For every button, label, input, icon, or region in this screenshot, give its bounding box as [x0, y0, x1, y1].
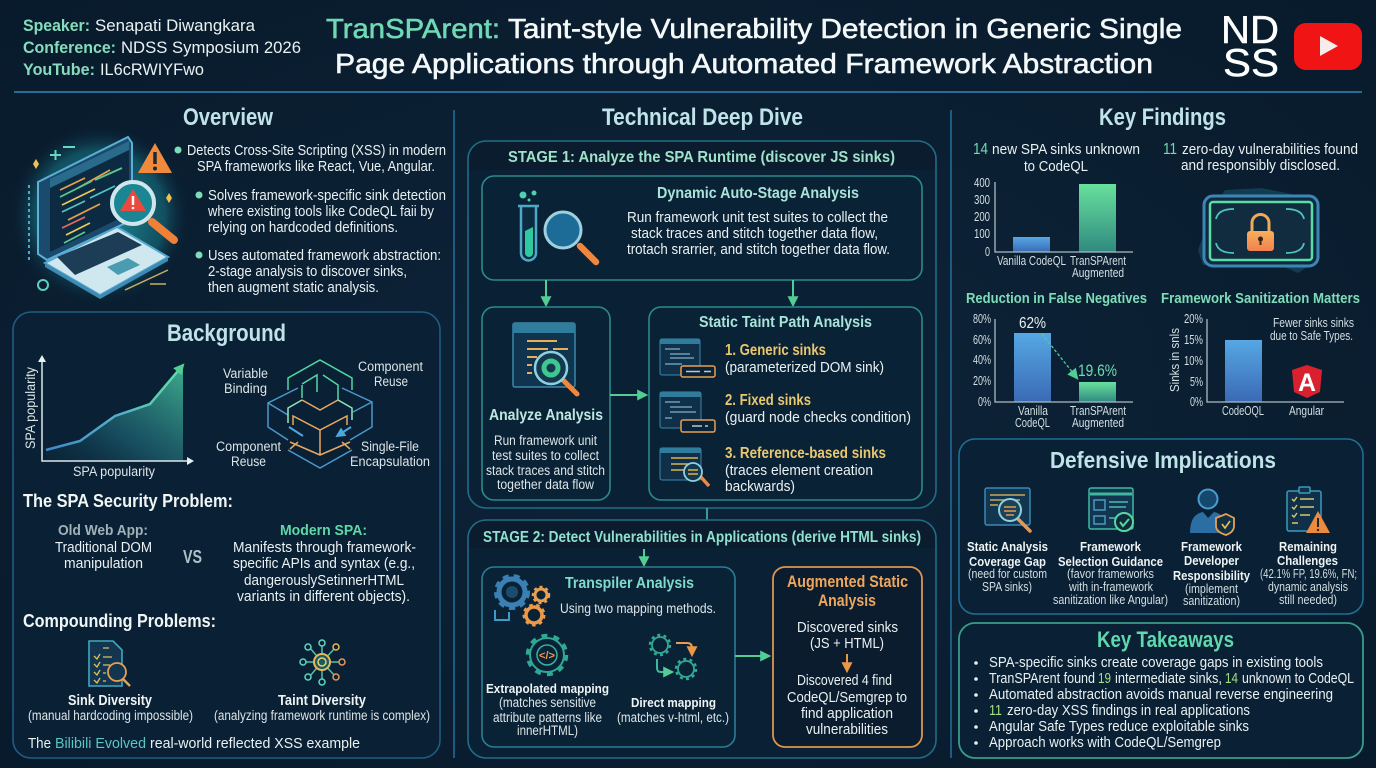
list: takeaways: intermediate sinks, [1115, 671, 1222, 687]
icon: lock card [1198, 188, 1318, 273]
diagram: SPA framework features: Single-File [361, 439, 419, 454]
chart: framework sanitization: Fewer sinks sinks [1273, 316, 1354, 330]
list: takeaways: zero-day XSS findings in real applications [1007, 703, 1250, 719]
box: static taint path analysis: (traces element creation [725, 463, 873, 479]
heading: overview: Overview [183, 104, 273, 131]
icon: framework selection [1089, 488, 1133, 531]
header: speaker info: Senapati Diwangkara [95, 17, 256, 35]
chart: framework sanitization: 10% [1184, 354, 1203, 368]
text block: overview bullets [174, 143, 446, 296]
text block: framework selection: Framework [1080, 539, 1142, 554]
text block: modern SPA: dangerouslySetinnerHTML [244, 573, 404, 589]
heading: SPA security problem: The SPA Security Problem: [23, 490, 233, 511]
box: analyze analysis: Run framework unit [494, 433, 597, 448]
icon: code gear: </> [539, 650, 555, 662]
box: analyze analysis: Analyze Analysis [489, 407, 603, 424]
title: Taint-style Vulnerability Detection in Generic Single [508, 13, 1182, 44]
diagram: SPA framework features: Variable [223, 366, 268, 381]
icon: gears [495, 576, 549, 625]
box: analyze analysis [482, 307, 610, 500]
text block: sink diversity: (manual hardcoding impossible) [28, 708, 193, 723]
box: static taint path analysis: Static Taint Path Analysis [699, 314, 872, 331]
header: speaker info: Conference: [23, 39, 116, 57]
panel: overview [10, 104, 446, 305]
text block: sink diversity: Sink Diversity [68, 693, 152, 709]
diagram: SPA framework features: Reuse [231, 454, 266, 469]
header: speaker info: Speaker: [23, 17, 90, 35]
chart: sinks found: 0 [985, 245, 990, 259]
icon: reference sink window [660, 448, 709, 486]
chart: false negatives: 20% [973, 374, 991, 388]
box: augmented static analysis: Augmented Static [787, 573, 908, 591]
chart: sinks found [974, 176, 1133, 280]
text block: modern SPA: Modern SPA: [280, 522, 367, 539]
box: transpiler analysis: Transpiler Analysis [565, 575, 694, 592]
box: static taint path analysis: (guard node checks condition) [725, 410, 911, 426]
list: takeaways: 19 [1098, 671, 1111, 687]
text block: developer responsibility: (implement [1185, 582, 1238, 596]
chart: framework sanitization: 0% [1190, 395, 1203, 409]
list: takeaways: TranSPArent found [989, 671, 1095, 687]
text block: overview bullets: Uses automated framework abstraction: [208, 248, 441, 264]
box: transpiler analysis: Extrapolated mapping [486, 681, 609, 696]
box: augmented static analysis: (JS + HTML) [810, 636, 884, 652]
NDSS logo: ND [1221, 9, 1279, 52]
heading: stage 2: STAGE 2: Detect Vulnerabilities in Applications (derive HTML sinks) [483, 529, 921, 546]
heading: key takeaways: Key Takeaways [1097, 627, 1234, 652]
chart: SPA popularity: SPA popularity [23, 367, 38, 449]
text block: remaining challenges: Challenges [1277, 553, 1338, 568]
icon: sink diversity document [89, 641, 130, 686]
text block: coverage gap: (need for custom [968, 567, 1047, 581]
text block: overview bullets: where existing tools like CodeQL faii by [207, 204, 435, 220]
text block: overview bullets: 2-stage analysis to discover sinks, [208, 264, 407, 280]
icon: generic sink code window [660, 339, 715, 377]
chart: framework sanitization: 5% [1190, 375, 1203, 389]
heading: defensive implications: Defensive Implications [1050, 447, 1276, 473]
diagram: SPA framework features: Encapsulation [350, 454, 430, 469]
heading: framework sanitization: Framework Sanitization Matters [1161, 291, 1360, 307]
panel: defensive implications [959, 439, 1363, 614]
text block: overview bullets: relying on hardcoded definitions. [208, 220, 398, 236]
chart: framework sanitization: 15% [1184, 333, 1203, 347]
text block: remaining challenges: still needed) [1279, 593, 1337, 607]
panel: stage 2 [468, 520, 936, 758]
heading: stage 1: STAGE 1: Analyze the SPA Runtime (discover JS sinks) [508, 149, 895, 166]
list: takeaways: 14 [1225, 671, 1238, 687]
text block: framework selection: with in-framework [1068, 580, 1154, 594]
box: dynamic auto-stage analysis: Dynamic Auto-Stage Analysis [657, 185, 859, 202]
chart: framework sanitization: due to Safe Types. [1270, 329, 1353, 343]
heading: reduction in false negatives: Reduction in False Negatives [966, 291, 1147, 307]
box: dynamic auto-stage analysis [482, 176, 922, 280]
box: augmented static analysis [773, 567, 922, 747]
title: TranSPArent: [326, 13, 500, 44]
box: transpiler analysis: attribute patterns like [493, 710, 602, 725]
icon: YouTube [1294, 23, 1362, 70]
chart: framework sanitization: A [1298, 369, 1316, 397]
box: augmented static analysis: vulnerabilities [806, 722, 888, 738]
icon: laptop with magnifier and warning [10, 125, 190, 305]
title: Page Applications through Automated Framework Abstraction [335, 48, 1153, 79]
text block: developer responsibility: Developer [1184, 553, 1239, 568]
icon: taint diversity network [300, 640, 345, 685]
diagram: SPA framework features: Component [358, 359, 423, 374]
chart: framework sanitization: Sinks in snls [1168, 328, 1182, 392]
arrow: dynamic to analyze [545, 280, 547, 305]
label: versus: VS [183, 547, 202, 567]
text block: Bilibili Evolved example: real-world reflected XSS example [150, 736, 360, 752]
chart: SPA popularity: SPA popularity [73, 464, 155, 479]
text block: Bilibili Evolved example [28, 736, 360, 752]
box: static taint path analysis: backwards) [725, 479, 795, 495]
box: analyze analysis: stack traces and stitch [486, 463, 605, 478]
text block: old web app [55, 522, 152, 572]
icon: developer with shield [1190, 490, 1234, 535]
text block: modern SPA [233, 522, 416, 605]
box: static taint path analysis: 3. Reference-based sinks [725, 445, 886, 462]
heading: technical deep dive: Technical Deep Dive [602, 104, 803, 131]
chart: sinks found: TranSPArent [1070, 254, 1126, 268]
box: analyze analysis: test suites to collect [492, 448, 599, 463]
icon: fixed sink code window [660, 392, 715, 432]
diagram: SPA framework features: Binding [224, 381, 267, 396]
panel: stage 1 [468, 141, 936, 508]
box: transpiler analysis: innerHTML) [517, 723, 578, 738]
list: takeaways: unknown to CodeQL [1242, 671, 1354, 687]
diagram: SPA framework features: Reuse [374, 374, 408, 389]
text block: overview bullets: Detects Cross-Site Scripting (XSS) in modern [187, 143, 446, 159]
arrow: dynamic to static [792, 280, 794, 305]
text block: remaining challenges: dynamic analysis [1268, 580, 1348, 594]
box: augmented static analysis: find application [801, 706, 893, 722]
list: takeaways: Automated abstraction avoids manual reverse engineering [989, 687, 1333, 703]
chart: framework sanitization: Angular [1289, 404, 1324, 418]
arrow: analyze to static [610, 394, 646, 396]
text block: sink diversity [28, 693, 193, 723]
stat: 14 new sinks: new SPA sinks unknown [992, 142, 1140, 158]
list: takeaways: SPA-specific sinks create coverage gaps in existing tools [989, 655, 1323, 671]
box: static taint path analysis: (parameterized DOM sink) [725, 360, 884, 376]
arrow: transpiler to augmented [735, 655, 769, 657]
icon: code gear [528, 636, 566, 674]
box: augmented static analysis: Discovered 4 find [797, 673, 892, 689]
text block: remaining challenges [1260, 539, 1357, 607]
heading: compounding problems: Compounding Problems: [23, 610, 216, 631]
box: transpiler analysis [482, 567, 735, 747]
list: takeaways [974, 655, 1354, 751]
text block: overview bullets: then augment static analysis. [208, 280, 379, 296]
text block: old web app: Old Web App: [58, 522, 148, 539]
text block: coverage gap: Static Analysis [967, 539, 1048, 554]
stat: 11 zero-days [1163, 141, 1358, 174]
box: static taint path analysis [649, 307, 922, 500]
box: augmented static analysis: CodeQL/Semgrep to [787, 690, 907, 706]
text block: coverage gap [967, 539, 1048, 594]
chart: framework sanitization [1168, 312, 1354, 418]
text block: framework selection: sanitization like Angular) [1053, 593, 1168, 607]
text block: modern SPA: Manifests through framework- [233, 540, 416, 556]
text block: modern SPA: variants in different objects). [237, 589, 410, 605]
text block: overview bullets: SPA frameworks like React, Vue, Angular. [197, 159, 435, 175]
chart: sinks found: 100 [974, 227, 990, 241]
box: dynamic auto-stage analysis: trotach srarrier, and stitch together data flow. [627, 242, 890, 258]
NDSS logo: SS [1223, 42, 1279, 85]
text block: developer responsibility: sanitization) [1183, 594, 1240, 608]
chart: false negatives: 40% [973, 353, 991, 367]
box: augmented static analysis: Discovered sinks [797, 620, 898, 636]
text block: taint diversity: Taint Diversity [278, 693, 366, 709]
list: takeaways: 11 [989, 703, 1002, 719]
text block: coverage gap: Coverage Gap [969, 554, 1046, 569]
header: speaker info [23, 17, 301, 79]
icon: code window with gear magnifier [513, 323, 577, 394]
text block: modern SPA: specific APIs and syntax (e.g., [233, 556, 415, 572]
list: takeaways: Approach works with CodeQL/Semgrep [989, 735, 1221, 751]
box: transpiler analysis: (matches sensitive [499, 695, 596, 710]
header: speaker info: YouTube: [23, 61, 95, 79]
panel: key takeaways [959, 623, 1363, 758]
arrow: stage 2 header to transpiler [643, 549, 645, 565]
chart: framework sanitization: 20% [1184, 312, 1203, 326]
icon: direct mapping gears [650, 635, 696, 679]
stat: 11 zero-days: 11 [1163, 141, 1177, 158]
text block: Bilibili Evolved example: The [28, 736, 51, 752]
icon: test tube and magnifier [518, 190, 596, 262]
stat: 11 zero-days: and responsibly disclosed. [1181, 158, 1340, 174]
NDSS logo [1221, 9, 1279, 85]
heading: key findings: Key Findings [1099, 104, 1226, 131]
box: analyze analysis: together data flow [497, 477, 594, 492]
chart: false negatives: Augmented [1072, 416, 1124, 430]
text block: developer responsibility [1173, 539, 1251, 608]
chart: framework sanitization: CodeOQL [1222, 404, 1264, 418]
heading: background: Background [167, 320, 286, 347]
text block: framework selection: (favor frameworks [1067, 567, 1154, 581]
list: takeaways: Angular Safe Types reduce exploitable sinks [989, 719, 1249, 735]
diagram: SPA framework features [216, 359, 430, 469]
box: dynamic auto-stage analysis: stack traces and stitch together data flow, [631, 226, 878, 242]
text block: taint diversity [214, 693, 430, 723]
chart: sinks found: Augmented [1072, 266, 1124, 280]
text block: old web app: manipulation [64, 556, 143, 572]
chart: sinks found: 200 [974, 210, 990, 224]
chart: false negatives: 0% [978, 395, 991, 409]
chart: sinks found: Vanilla CodeQL [997, 254, 1066, 268]
box: dynamic auto-stage analysis: Run framework unit test suites to collect the [627, 210, 888, 226]
chart: SPA popularity [23, 355, 194, 479]
chart: false negatives: TranSPArent [1070, 404, 1126, 418]
chart: false negatives: 80% [973, 312, 991, 326]
chart: false negatives: 60% [973, 333, 991, 347]
box: transpiler analysis: Using two mapping methods. [560, 601, 716, 616]
text block: developer responsibility: Framework [1181, 539, 1243, 554]
icon: clipboard warning [1287, 487, 1330, 533]
diagram: SPA framework features: Component [216, 439, 281, 454]
box: augmented static analysis: Analysis [818, 592, 876, 610]
text block: Bilibili Evolved example: Bilibili Evolved [55, 736, 146, 752]
box: static taint path analysis: 2. Fixed sinks [725, 392, 811, 409]
chart: false negatives: 62% [1019, 315, 1046, 332]
stat: 14 new sinks: 14 [973, 141, 988, 158]
text block: framework selection: Selection Guidance [1058, 554, 1163, 569]
box: static taint path analysis: 1. Generic sinks [725, 342, 826, 359]
box: transpiler analysis: Direct mapping [631, 695, 716, 710]
text block: overview bullets: Solves framework-specific sink detection [208, 188, 446, 204]
chart: sinks found: 300 [974, 193, 990, 207]
stat: 11 zero-days: zero-day vulnerabilities found [1182, 142, 1358, 158]
chart: false negatives: CodeQL [1015, 416, 1050, 430]
stat: 14 new sinks: to CodeQL [1024, 159, 1088, 175]
text block: framework selection [1053, 539, 1168, 607]
header: speaker info: NDSS Symposium 2026 [121, 39, 301, 57]
panel: background [13, 312, 440, 758]
chart: false negatives [973, 312, 1133, 430]
chart: sinks found: 400 [974, 176, 990, 190]
header: speaker info: IL6cRWIYFwo [100, 61, 204, 79]
text block: old web app: Traditional DOM [55, 540, 152, 556]
text block: developer responsibility: Responsibility [1173, 568, 1251, 583]
box: transpiler analysis: (matches v-html, etc.) [617, 710, 729, 725]
text block: coverage gap: SPA sinks) [982, 580, 1032, 594]
stat: 14 new sinks [973, 141, 1140, 175]
text block: remaining challenges: Remaining [1279, 539, 1337, 554]
chart: false negatives: Vanilla [1018, 404, 1048, 418]
icon: coverage gap [985, 488, 1030, 531]
text block: taint diversity: (analyzing framework runtime is complex) [214, 708, 430, 723]
title [326, 13, 1182, 79]
chart: false negatives: 19.6% [1078, 361, 1117, 380]
